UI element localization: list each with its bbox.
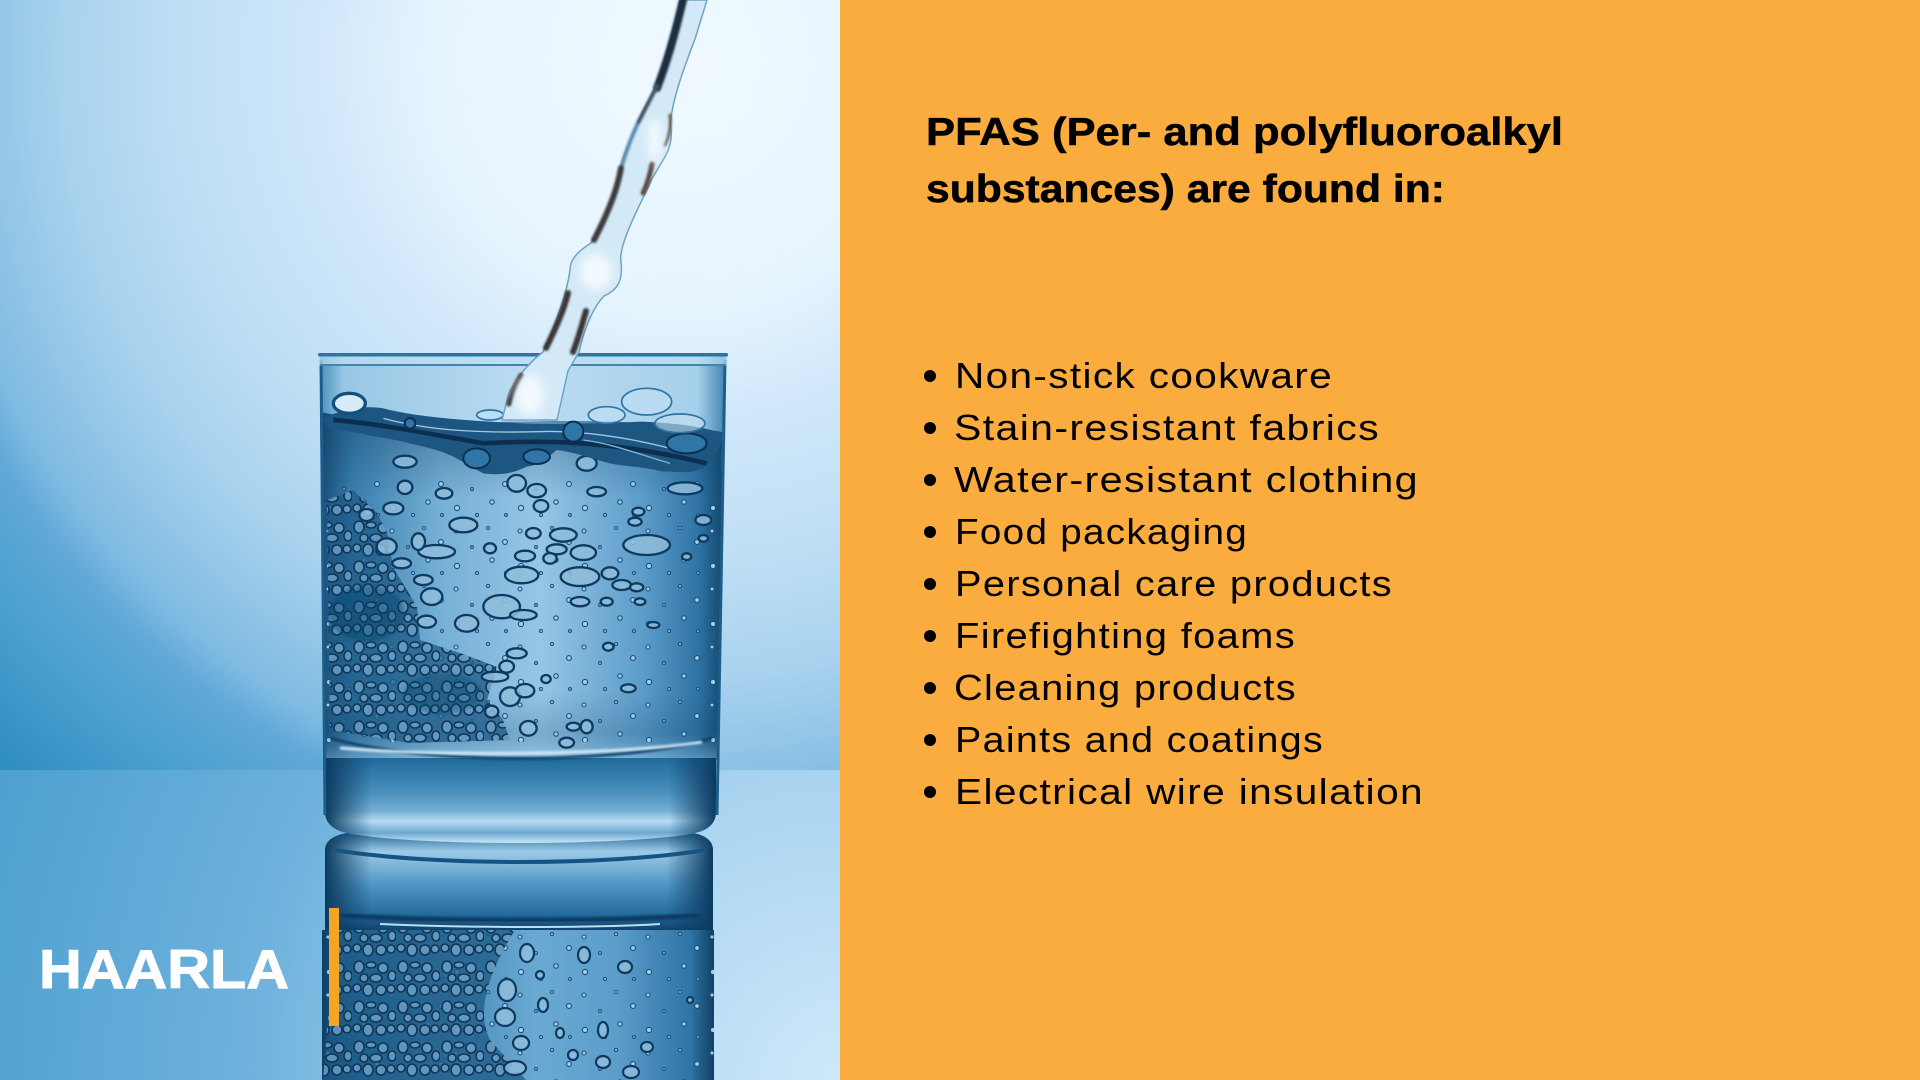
water body	[320, 412, 722, 760]
panel: water photo	[0, 0, 840, 1080]
list: PFAS sources: Cleaning products	[954, 667, 1297, 708]
background: reflective surface	[0, 770, 840, 1080]
list: PFAS sources: Electrical wire insulation	[955, 771, 1424, 812]
logo: HAARLA: HAARLA	[39, 938, 289, 1000]
reflected loose bubbles	[495, 944, 693, 1078]
list: PFAS sources: Personal care products	[955, 563, 1393, 604]
tiny bubbles	[322, 480, 720, 742]
list: PFAS sources: Stain-resistant fabrics	[954, 407, 1380, 448]
list: PFAS sources: Firefighting foams	[955, 615, 1296, 656]
loose bubbles	[328, 456, 711, 748]
panel: orange content	[840, 0, 1920, 1080]
foam bubbles	[477, 388, 705, 433]
reflected base	[325, 832, 713, 930]
reflected water	[322, 930, 714, 1080]
reflected dense bubbles	[323, 930, 526, 1080]
list: PFAS sources: Paints and coatings	[955, 719, 1324, 760]
dense bubble cluster	[327, 490, 510, 743]
heading: substances) are found in:	[926, 168, 1445, 211]
list: PFAS sources	[924, 355, 1424, 812]
list: PFAS sources: Food packaging	[955, 511, 1248, 552]
list: PFAS sources: Water-resistant clothing	[954, 459, 1419, 500]
glass walls	[321, 360, 325, 815]
icon: glass reflection	[322, 832, 714, 1080]
glass rim	[318, 353, 728, 366]
wave band at water surface	[323, 388, 722, 474]
heading	[926, 111, 1563, 211]
background: upper blue gradient	[0, 0, 840, 770]
glass base	[325, 758, 716, 843]
heading: PFAS (Per- and polyfluoroalkyl	[926, 111, 1563, 154]
glass upper air section	[320, 356, 726, 450]
icon: pouring water stream	[502, 0, 707, 420]
icon: glass of water	[318, 353, 728, 843]
list: PFAS sources: Non-stick cookware	[955, 355, 1333, 396]
logo divider bar	[329, 908, 339, 1026]
